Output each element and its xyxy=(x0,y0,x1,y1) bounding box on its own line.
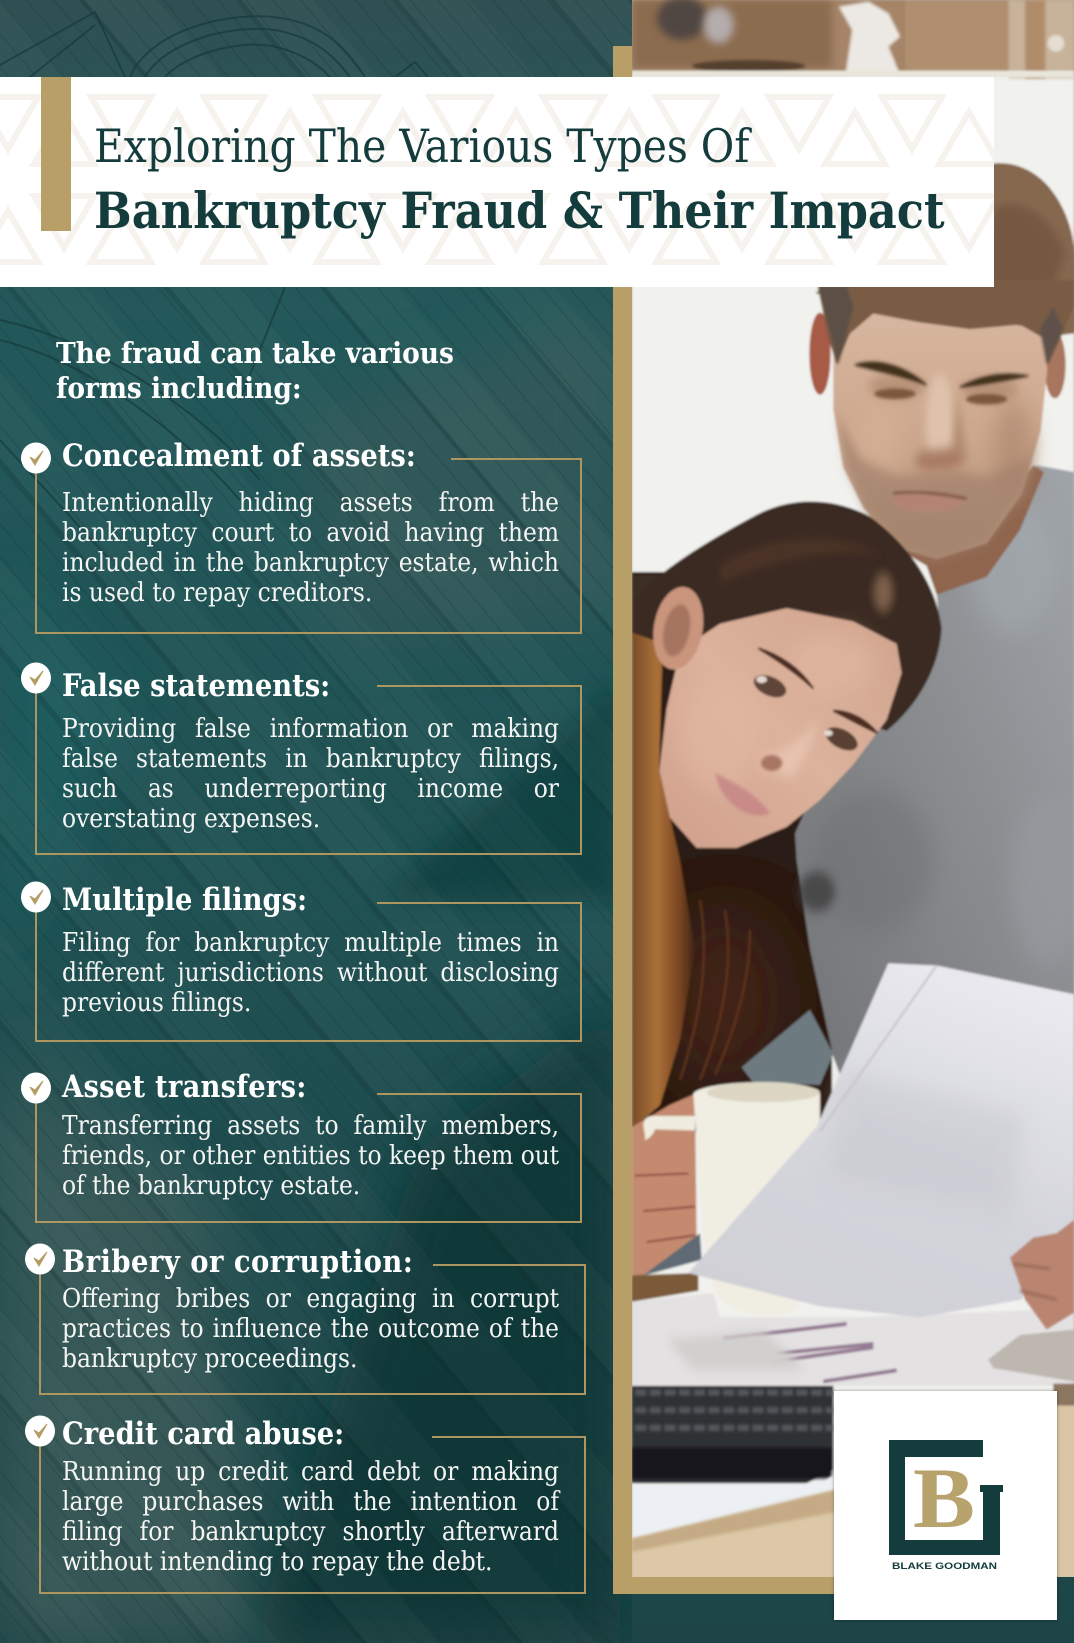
body: practices to influence the outcome of the xyxy=(62,1314,559,1344)
body: overstating expenses. xyxy=(62,804,320,834)
photo: woman's long hair xyxy=(632,615,695,1130)
photo: woman's head and hair xyxy=(632,501,942,848)
heading: Concealment of assets: xyxy=(62,438,416,474)
heading: Bribery or corruption: xyxy=(62,1244,413,1280)
frame top rule xyxy=(377,1093,582,1095)
frame top rule xyxy=(433,1264,586,1266)
frame top rule xyxy=(451,458,582,460)
heading: Credit card abuse: xyxy=(62,1416,344,1452)
body xyxy=(62,488,559,608)
frame top rule xyxy=(377,902,582,904)
panel: false statements xyxy=(21,662,582,855)
panel: asset transfers xyxy=(21,1068,582,1223)
heading: Asset transfers: xyxy=(62,1068,307,1104)
body: different jurisdictions without disclosing xyxy=(62,958,559,988)
photo: blurred shelf background xyxy=(632,0,1074,78)
icon: check xyxy=(21,442,51,474)
frame top rule xyxy=(432,1436,586,1438)
frame xyxy=(35,459,582,634)
body xyxy=(62,1456,560,1576)
photo: man's hair xyxy=(815,163,1074,337)
icon: check xyxy=(21,1072,51,1104)
gold accent bar xyxy=(41,77,71,231)
body: bankruptcy court to avoid having them xyxy=(62,518,559,548)
icon: check xyxy=(25,1244,55,1274)
icon: check xyxy=(25,1416,55,1446)
body xyxy=(62,1284,559,1374)
heading: False statements: xyxy=(62,668,330,704)
body: Providing false information or making xyxy=(62,714,559,744)
gold frame xyxy=(613,46,1000,1594)
body: large purchases with the intention of xyxy=(62,1486,559,1516)
frame xyxy=(35,903,582,1042)
logo mark: BLAKE GOODMAN xyxy=(892,1561,997,1572)
body: Intentionally hiding assets from the xyxy=(62,488,559,518)
logo mark: B xyxy=(913,1450,975,1546)
body: without intending to repay the debt. xyxy=(62,1546,492,1576)
body: included in the bankruptcy estate, which xyxy=(62,548,559,578)
title line 2: Bankruptcy Fraud & Their Impact xyxy=(94,181,945,240)
body: Offering bribes or engaging in corrupt xyxy=(62,1284,559,1314)
body: filing for bankruptcy shortly afterward xyxy=(62,1516,559,1546)
body: friends, or other entities to keep them out xyxy=(62,1140,559,1170)
panel: multiple filings xyxy=(21,882,582,1042)
frame top rule xyxy=(377,685,582,687)
intro text: forms including: xyxy=(56,370,302,405)
body xyxy=(62,1110,559,1200)
panel: bribery or corruption xyxy=(25,1244,586,1395)
body: such as underreporting income or xyxy=(62,774,559,804)
triangle pattern xyxy=(0,94,994,265)
logo mark xyxy=(889,1440,1003,1572)
frame xyxy=(35,686,582,855)
body: Running up credit card debt or making xyxy=(62,1456,559,1486)
frame xyxy=(39,1437,586,1594)
body: of the bankruptcy estate. xyxy=(62,1170,360,1200)
frame xyxy=(35,1094,582,1223)
body: previous filings. xyxy=(62,988,251,1018)
title line 1: Exploring The Various Types Of xyxy=(94,120,749,173)
photo: man's head xyxy=(809,280,1074,595)
intro text: The fraud can take various xyxy=(56,335,454,370)
body xyxy=(62,928,559,1018)
photo: hands, mug, documents and desk xyxy=(632,963,1074,1578)
panel: credit card abuse xyxy=(25,1416,586,1594)
logo card xyxy=(834,1391,1057,1620)
panel: concealment of assets xyxy=(21,438,582,634)
icon: check xyxy=(21,882,51,912)
frame xyxy=(39,1265,586,1395)
title banner xyxy=(0,77,994,287)
icon: check xyxy=(21,662,51,694)
body: bankruptcy proceedings. xyxy=(62,1344,357,1374)
body: Transferring assets to family members, xyxy=(62,1110,559,1140)
photo: man's shirt xyxy=(795,465,1074,1110)
photo: couple reading documents xyxy=(632,0,1074,1578)
heading: Multiple filings: xyxy=(62,882,307,918)
body: Filing for bankruptcy multiple times in xyxy=(62,928,559,958)
body: is used to repay creditors. xyxy=(62,578,372,608)
body: false statements in bankruptcy filings, xyxy=(62,744,559,774)
intro text xyxy=(56,335,454,405)
body xyxy=(62,714,559,834)
